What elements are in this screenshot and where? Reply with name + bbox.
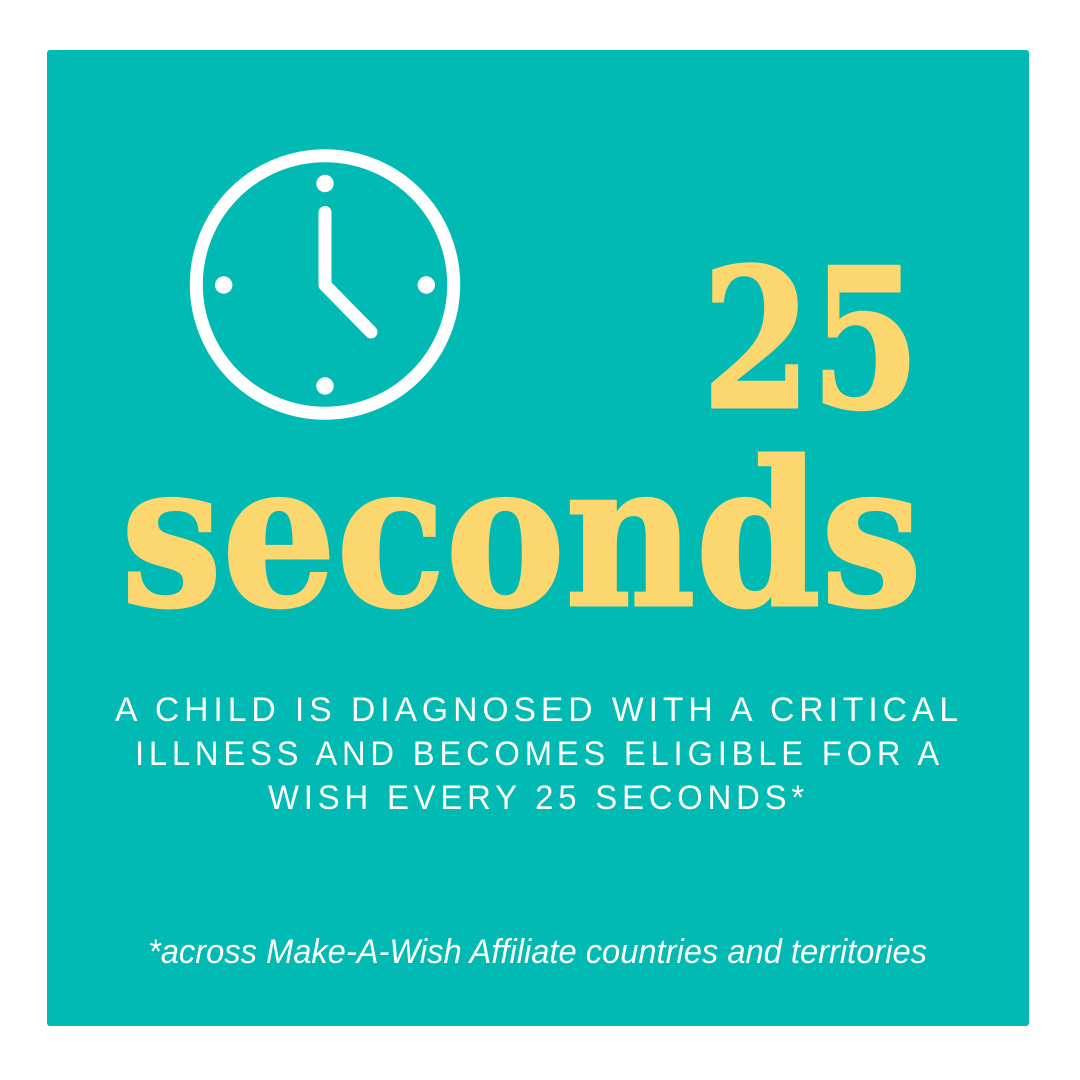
text block: description: WISH EVERY 25 SECONDS* xyxy=(268,779,809,817)
text block: description: A CHILD IS DIAGNOSED WITH A CRITICAL xyxy=(115,691,963,729)
text block: description xyxy=(115,691,963,817)
footnote: *across Make-A-Wish Affiliate countries and territories xyxy=(148,933,927,971)
number: 25: 25 xyxy=(702,226,920,453)
icon: clock xyxy=(196,156,454,413)
text block: description: ILLNESS AND BECOMES ELIGIBLE FOR A xyxy=(135,735,944,773)
heading: seconds: seconds xyxy=(121,418,922,653)
